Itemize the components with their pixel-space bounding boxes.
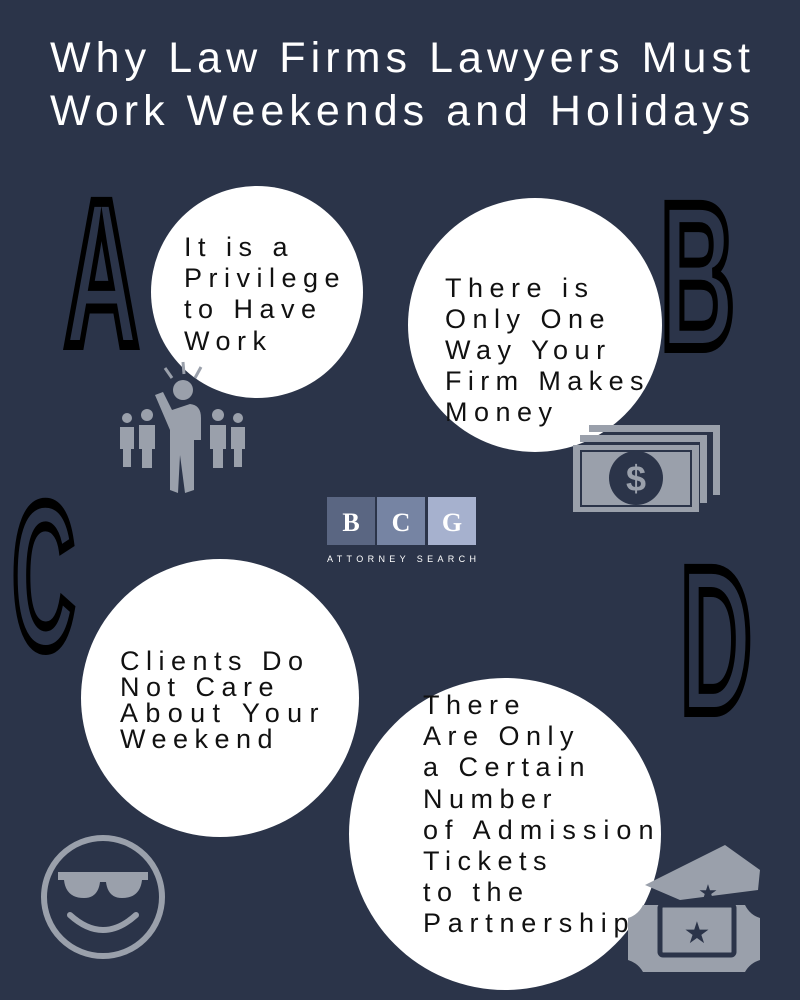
panel: D partnership: Are Only [423, 721, 580, 751]
icon: tickets: ★ [698, 881, 718, 906]
panel: C clients [81, 559, 359, 837]
logo: BCG: B [342, 508, 360, 537]
logo: BCG: G [442, 508, 462, 537]
panel: B money [408, 198, 662, 452]
panel: B money: Firm Makes [445, 366, 650, 396]
logo: BCG [327, 497, 476, 564]
panel: D partnership: Tickets [423, 846, 553, 876]
title: Why Law Firms Lawyers Must [50, 34, 750, 82]
panel: C clients: Weekend [120, 724, 279, 754]
icon: tickets [628, 845, 760, 972]
panel: D partnership: of Admission [423, 815, 660, 845]
title: Work Weekends and Holidays [50, 87, 750, 135]
panel: B money: Money [445, 397, 559, 427]
panel: D partnership: Partnership [423, 908, 635, 938]
panel: D partnership: There [423, 690, 526, 720]
panel: D partnership: a Certain [423, 752, 591, 782]
panel: C clients: Not Care [120, 672, 280, 702]
panel: A privilege: Work [184, 326, 273, 356]
letter C: C [12, 460, 75, 692]
logo: BCG: ATTORNEY SEARCH [327, 554, 476, 564]
panel: C clients: Clients Do [120, 646, 310, 676]
icon: money: $ [626, 458, 646, 499]
panel: B money: Way Your [445, 335, 612, 365]
title [50, 34, 750, 135]
panel: C clients: About Your [120, 698, 325, 728]
panel: B money: Only One [445, 304, 611, 334]
icon: tickets: ★ [684, 916, 710, 951]
panel: A privilege [151, 186, 363, 398]
panel: D partnership: to the [423, 877, 530, 907]
icon: money [573, 425, 720, 512]
panel: D partnership: Number [423, 784, 558, 814]
panel: D partnership [349, 678, 661, 990]
panel: B money: There is [445, 273, 595, 303]
icon: people leader [120, 362, 245, 493]
panel: A privilege: Privilege [184, 263, 346, 293]
icon: smiley sunglasses [44, 838, 162, 956]
letter D: D [680, 523, 752, 757]
logo: BCG: C [392, 508, 410, 537]
panel: A privilege: It is a [184, 232, 294, 262]
panel: A privilege: to Have [184, 294, 323, 324]
letter A: A [64, 157, 139, 389]
letter B: B [660, 160, 735, 392]
